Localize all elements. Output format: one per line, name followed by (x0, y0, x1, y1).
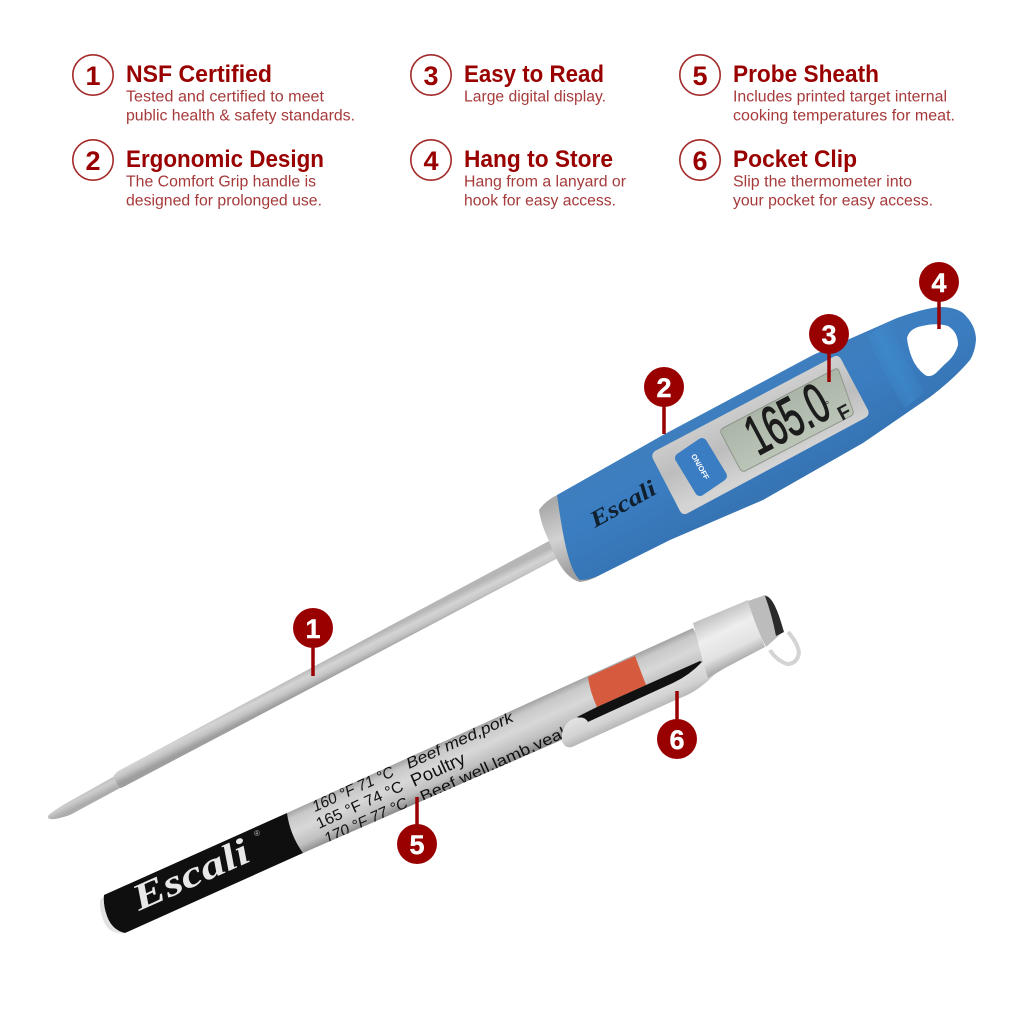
target temperature text: Poultry (407, 748, 468, 791)
item 2: Ergonomic Design: designed for prolonged use. (126, 192, 322, 210)
thermometer probe (48, 541, 558, 819)
marker 5 (397, 797, 437, 864)
item 1: NSF Certified: Tested and certified to meet (126, 88, 325, 106)
item 3: Easy to Read (411, 55, 606, 106)
item 1: NSF Certified: public health & safety standards. (126, 108, 355, 124)
marker 5: 5 (409, 830, 425, 860)
marker 2 (644, 367, 684, 434)
marker 6: 6 (669, 725, 685, 755)
item 1: NSF Certified: 1 (85, 61, 101, 91)
marker 6 (657, 691, 697, 759)
marker 1: 1 (305, 614, 321, 644)
item 4: Hang to Store: Hang to Store (464, 146, 613, 173)
black end with logo (100, 813, 303, 933)
marker 4: 4 (931, 268, 947, 298)
temperature reading: 165.0 (734, 371, 840, 467)
item 5: Probe Sheath: Includes printed target internal (733, 88, 947, 106)
black end with logo: Escali (125, 831, 257, 920)
metal collar (539, 495, 600, 582)
item 4: Hang to Store: hook for easy access. (464, 192, 616, 210)
item 6: Pocket Clip: Pocket Clip (733, 146, 857, 173)
brushed metal plate (652, 356, 869, 514)
cap (693, 600, 765, 678)
cap ring (748, 595, 783, 647)
item 4: Hang to Store (411, 140, 626, 210)
hanging loop (770, 632, 799, 664)
item 2: Ergonomic Design (73, 140, 324, 210)
item 2: Ergonomic Design: The Comfort Grip handle is (126, 174, 316, 190)
black end with logo: ® (254, 829, 260, 838)
item 3: Easy to Read: Large digital display. (464, 88, 606, 106)
item 3: Easy to Read: Easy to Read (464, 61, 604, 88)
pocket clip gap (577, 661, 702, 722)
item 6: Pocket Clip (680, 140, 933, 210)
probe sheath (100, 595, 799, 933)
unit: F (834, 400, 855, 425)
item 5: Probe Sheath (680, 55, 955, 124)
marker 3: 3 (821, 320, 837, 350)
marker 3 (809, 314, 849, 382)
item 6: Pocket Clip: Slip the thermometer into (733, 174, 912, 190)
legend: feature list (73, 55, 955, 209)
item 6: Pocket Clip: your pocket for easy access. (733, 192, 933, 210)
marker 2: 2 (656, 373, 672, 403)
thermometer handle (539, 307, 976, 582)
item 1: NSF Certified: NSF Certified (126, 61, 272, 88)
blue grip with hanging hole (557, 307, 976, 580)
item 5: Probe Sheath: Probe Sheath (733, 61, 879, 88)
LCD display (721, 369, 855, 471)
item 2: Ergonomic Design: 2 (85, 146, 101, 176)
marker 1 (293, 608, 333, 676)
item 5: Probe Sheath: cooking temperatures for meat. (733, 108, 955, 124)
item 3: Easy to Read: 3 (423, 61, 439, 91)
item 5: Probe Sheath: 5 (692, 61, 708, 91)
pocket clip (562, 662, 717, 747)
LCD display: ° (824, 399, 833, 412)
item 2: Ergonomic Design: Ergonomic Design (126, 146, 324, 173)
item 1: NSF Certified (73, 55, 355, 124)
item 6: Pocket Clip: 6 (692, 146, 708, 176)
target temperature text (314, 713, 563, 842)
Escali logo on handle: Escali (584, 475, 661, 533)
marker 4 (919, 262, 959, 329)
cap opening (765, 596, 784, 636)
on/off button: ON/OFF (689, 452, 711, 482)
item 4: Hang to Store: 4 (423, 146, 439, 176)
target temperature text: 165 °F 74 °C (314, 778, 406, 833)
item 4: Hang to Store: Hang from a lanyard or (464, 174, 626, 190)
target temperature text: 160 °F 71 °C (310, 763, 397, 816)
silver sheath body (287, 628, 717, 853)
red marker band (588, 656, 646, 707)
target temperature text: Beef well,lamb,veal (418, 725, 568, 806)
target temperature text: Beef med,pork (404, 708, 518, 773)
grip highlight (874, 328, 918, 406)
on/off button (680, 443, 722, 491)
target temperature text: 170 °F 77 °C (322, 795, 411, 848)
